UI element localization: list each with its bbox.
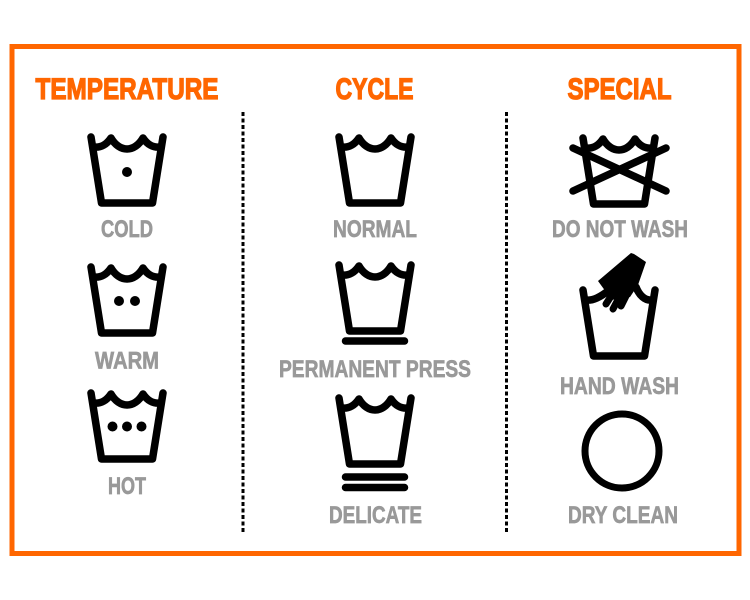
- label: dry clean: DRY CLEAN: [568, 502, 678, 529]
- label: do not wash: DO NOT WASH: [552, 216, 688, 243]
- label: warm: WARM: [95, 348, 159, 374]
- icon: dry clean: [585, 414, 659, 488]
- icon: hand: [598, 253, 646, 309]
- label: permanent press: PERMANENT PRESS: [279, 356, 471, 383]
- label: normal: NORMAL: [333, 216, 417, 243]
- heading: cycle: CYCLE: [336, 73, 414, 106]
- heading: temperature: TEMPERATURE: [36, 73, 218, 106]
- icon: do not wash: [573, 138, 666, 204]
- icon: permanent press cycle: [339, 265, 411, 341]
- icon: normal cycle: [339, 137, 411, 203]
- label: delicate: DELICATE: [329, 502, 422, 529]
- label: cold: COLD: [101, 216, 153, 243]
- icon: delicate cycle: [339, 398, 411, 488]
- icon: hand wash: [583, 253, 655, 356]
- label: hand wash: HAND WASH: [560, 373, 679, 400]
- icon: hot wash: [91, 393, 163, 459]
- heading: special: SPECIAL: [568, 73, 672, 106]
- icon: cold wash: [91, 137, 163, 203]
- label: hot: HOT: [108, 473, 146, 500]
- icon: warm wash: [91, 267, 163, 333]
